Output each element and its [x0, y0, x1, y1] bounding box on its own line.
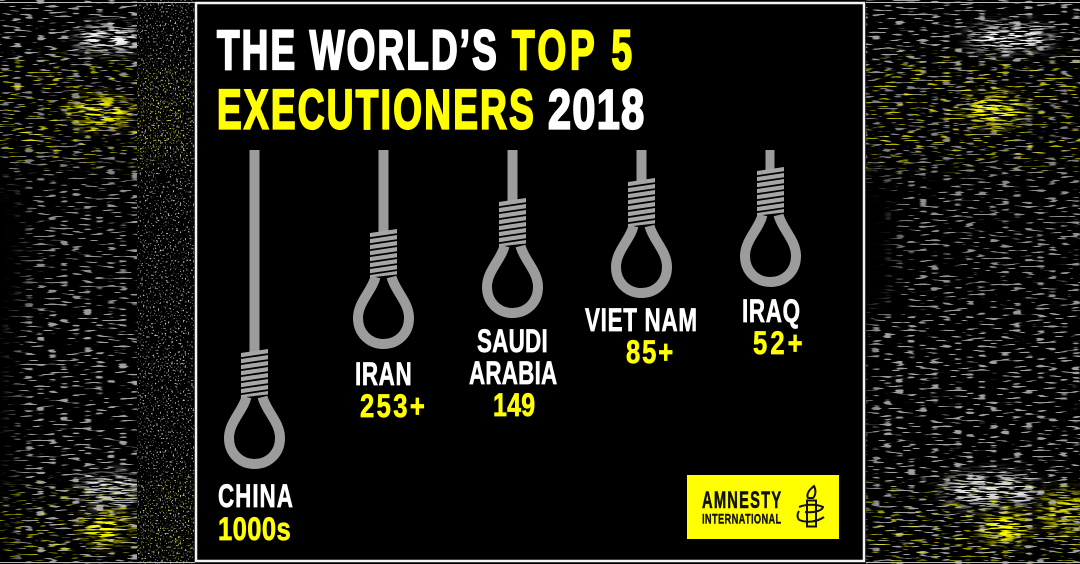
label: Iraq 52+ [742, 293, 803, 362]
title [217, 19, 644, 141]
background: right noise texture [866, 0, 1080, 564]
label: Saudi Arabia 149: ARABIA [469, 355, 557, 391]
title: TOP 5 [512, 19, 632, 82]
label: Saudi Arabia 149 [469, 323, 557, 424]
label: Iran 253+: IRAN [355, 356, 412, 392]
noose: Iran [358, 150, 409, 344]
noose: Saudi Arabia [487, 150, 538, 313]
title: THE WORLD’S [217, 19, 497, 82]
label: China 1000s: 1000s [218, 512, 291, 548]
logo: Amnesty International: AMNESTY [702, 487, 782, 514]
label: China 1000s [218, 478, 293, 548]
title: EXECUTIONERS [217, 79, 534, 141]
label: Iraq 52+: 52+ [753, 326, 803, 362]
label: Iraq 52+: IRAQ [742, 293, 800, 329]
logo: Amnesty International: INTERNATIONAL [702, 511, 781, 527]
label: Saudi Arabia 149: 149 [493, 388, 535, 424]
label: Saudi Arabia 149: SAUDI [477, 323, 548, 359]
noose: Iraq [745, 150, 796, 282]
logo: Amnesty International [687, 475, 839, 539]
noose: Viet Nam [616, 150, 667, 293]
label: China 1000s: CHINA [218, 478, 293, 514]
title: 2018 [548, 78, 644, 141]
background: left noise texture [0, 0, 194, 564]
panel: black poster with white border [196, 3, 864, 561]
icon: candle in barbed wire [798, 486, 824, 526]
label: Viet Nam 85+: 85+ [626, 335, 673, 371]
noose: China [229, 150, 280, 464]
label: Iran 253+: 253+ [360, 389, 425, 425]
label: Viet Nam 85+: VIET NAM [585, 302, 697, 338]
label: Viet Nam 85+ [585, 302, 697, 371]
label: Iran 253+ [355, 356, 425, 425]
